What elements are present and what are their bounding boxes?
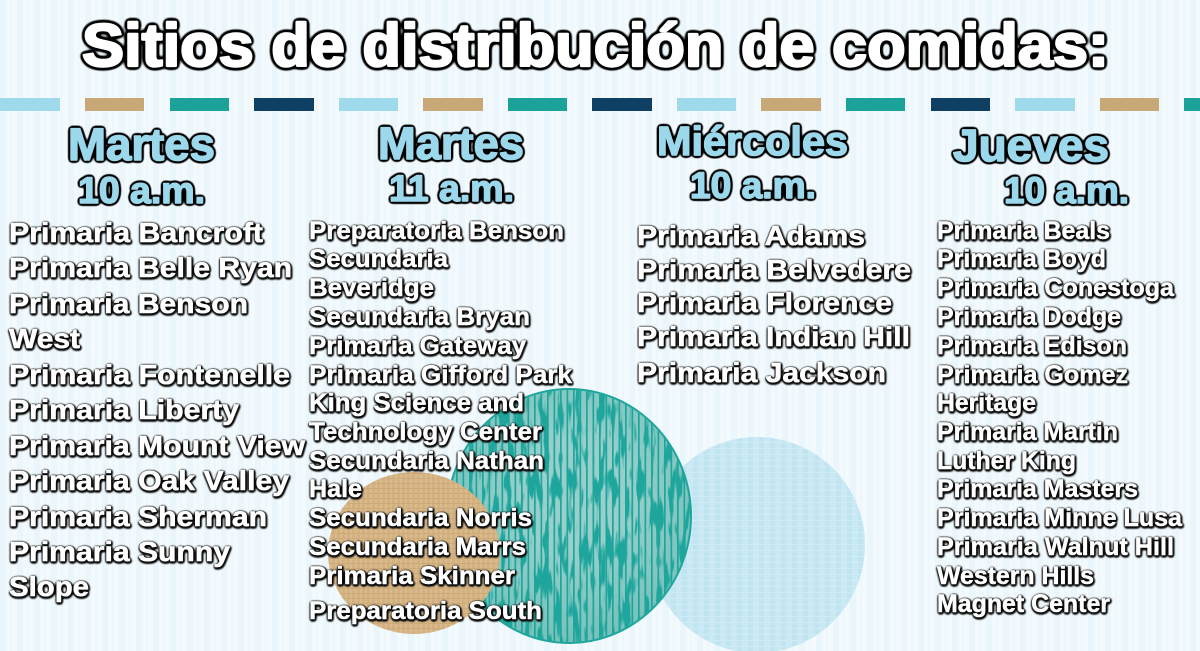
site list — [9, 217, 306, 602]
heading: Martes: Martes — [378, 118, 524, 169]
heading: Miércoles: Miércoles — [657, 118, 848, 164]
site list: Primaria Edison — [937, 332, 1127, 360]
site list: Primaria Dodge — [937, 303, 1121, 331]
time: 10 a.m.: 10 a.m. — [1004, 170, 1129, 211]
site list: Secundaria Nathan — [309, 447, 544, 475]
site list: Primaria Jackson — [637, 357, 886, 388]
time: 10 a.m.: 10 a.m. — [690, 165, 816, 206]
teal textured circle — [446, 388, 692, 644]
site list: Primaria Belvedere — [637, 254, 911, 285]
site list: Secundaria — [309, 245, 449, 273]
site list: Primaria Sunny — [9, 536, 231, 567]
site list: Luther King — [937, 447, 1076, 475]
site list: Primaria Gomez — [937, 361, 1128, 389]
site list: Preparatoria Benson — [309, 217, 564, 245]
site list: Primaria Indian Hill — [637, 321, 910, 352]
panel: Martes 11 a.m. — [309, 118, 572, 625]
site list: Primaria Beals — [937, 217, 1110, 245]
site list: Primaria Bancroft — [9, 217, 263, 248]
site list: Primaria Masters — [937, 475, 1138, 503]
site list: Heritage — [937, 389, 1036, 417]
site list: Primaria Florence — [637, 287, 892, 318]
tan textured circle — [328, 472, 500, 634]
site list: Secundaria Norris — [309, 504, 532, 532]
site list: Slope — [9, 571, 89, 602]
site list: West — [9, 323, 80, 354]
site list: Primaria Gateway — [309, 332, 526, 360]
heading: Martes: Martes — [68, 119, 215, 170]
panel: Jueves 10 a.m. — [937, 120, 1183, 618]
site list: Primaria Walnut Hill — [937, 533, 1174, 561]
heading: Jueves: Jueves — [953, 120, 1109, 171]
light blue circle — [649, 437, 865, 651]
site list: Primaria Adams — [637, 220, 865, 251]
site list: Primaria Gifford Park — [309, 361, 572, 389]
site list: Primaria Minne Lusa — [937, 504, 1183, 532]
site list: Western Hills — [937, 562, 1094, 590]
site list: Primaria Fontenelle — [9, 359, 290, 390]
site list — [637, 220, 911, 388]
site list: Magnet Center — [937, 590, 1110, 618]
site list: Primaria Martin — [937, 418, 1118, 446]
site list: Primaria Oak Valley — [9, 465, 290, 496]
site list: Primaria Benson — [9, 288, 248, 319]
site list: Primaria Liberty — [9, 394, 240, 425]
dashed color divider — [0, 98, 1200, 111]
site list: Primaria Boyd — [937, 245, 1106, 273]
time: 10 a.m.: 10 a.m. — [78, 170, 205, 211]
title: Sitios de distribución de comidas: — [82, 12, 1109, 79]
site list: Technology Center — [309, 418, 542, 446]
site list: Primaria Mount View — [9, 430, 306, 461]
panel: Martes 10 a.m. — [9, 119, 306, 602]
site list: Secundaria Bryan — [309, 303, 530, 331]
site list: Secundaria Marrs — [309, 533, 526, 561]
site list: Primaria Conestoga — [937, 274, 1175, 302]
panel: Miércoles 10 a.m. — [637, 118, 911, 388]
site list — [937, 217, 1183, 618]
site list: Beveridge — [309, 274, 434, 302]
site list: Primaria Belle Ryan — [9, 252, 292, 283]
site list: King Science and — [309, 389, 524, 417]
site list: Preparatoria South — [309, 597, 542, 625]
site list: Primaria Skinner — [309, 562, 515, 590]
site list: Hale — [309, 475, 362, 503]
time: 11 a.m.: 11 a.m. — [389, 168, 514, 209]
site list — [309, 217, 572, 625]
site list: Primaria Sherman — [9, 501, 267, 532]
